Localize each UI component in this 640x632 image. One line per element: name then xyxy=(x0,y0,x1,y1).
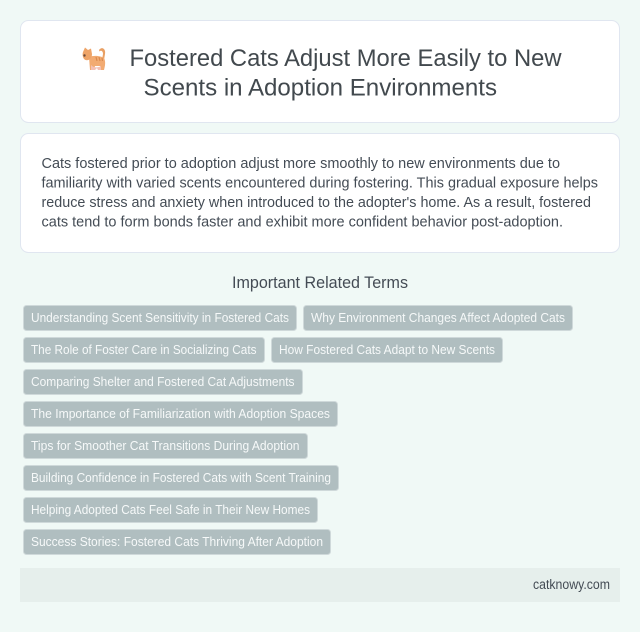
summary paragraph: Cats fostered prior to adoption adjust more smoothly to new environments due to xyxy=(42,155,560,172)
tag: Tips for Smoother Cat Transitions During Adoption xyxy=(31,438,300,453)
tag: The Importance of Familiarization with Adoption Spaces xyxy=(31,406,330,421)
panel: summary card xyxy=(20,134,620,252)
tag xyxy=(24,402,338,426)
summary paragraph: familiarity with varied scents encountered during fostering. This gradual exposure helps xyxy=(42,174,598,192)
tag: The Role of Foster Care in Socializing Cats xyxy=(31,342,257,357)
tag xyxy=(24,434,308,458)
tag xyxy=(24,466,338,490)
related terms tags xyxy=(24,306,572,554)
heading: related terms: Important Related Terms xyxy=(232,274,408,292)
tag: How Fostered Cats Adapt to New Scents xyxy=(279,342,495,357)
summary paragraph: reduce stress and anxiety when introduced to the adopter's home. As a result, fostered xyxy=(42,194,591,211)
tag xyxy=(24,370,302,394)
tag: Helping Adopted Cats Feel Safe in Their New Homes xyxy=(31,502,310,517)
tag xyxy=(24,306,296,330)
title text xyxy=(130,45,562,102)
tag: Why Environment Changes Affect Adopted Cats xyxy=(311,310,565,325)
tag xyxy=(304,306,572,330)
title text: Fostered Cats Adjust More Easily to New xyxy=(130,45,562,72)
tag xyxy=(24,338,264,362)
icon: cat emoji xyxy=(83,48,105,70)
summary paragraph xyxy=(42,155,598,230)
tag: Understanding Scent Sensitivity in Fostered Cats xyxy=(31,310,289,325)
footer source: catknowy.com xyxy=(533,577,610,592)
summary paragraph: cats tend to form bonds faster and exhibit more confident behavior post-adoption. xyxy=(42,214,563,230)
tag: Building Confidence in Fostered Cats with Scent Training xyxy=(31,470,331,485)
tag xyxy=(272,338,502,362)
tag: Success Stories: Fostered Cats Thriving After Adoption xyxy=(31,534,323,549)
title text: Scents in Adoption Environments xyxy=(144,74,497,102)
panel: title card xyxy=(20,20,620,122)
tag xyxy=(24,530,330,554)
footer bar xyxy=(20,568,620,602)
tag xyxy=(24,498,318,522)
tag: Comparing Shelter and Fostered Cat Adjustments xyxy=(31,374,295,389)
